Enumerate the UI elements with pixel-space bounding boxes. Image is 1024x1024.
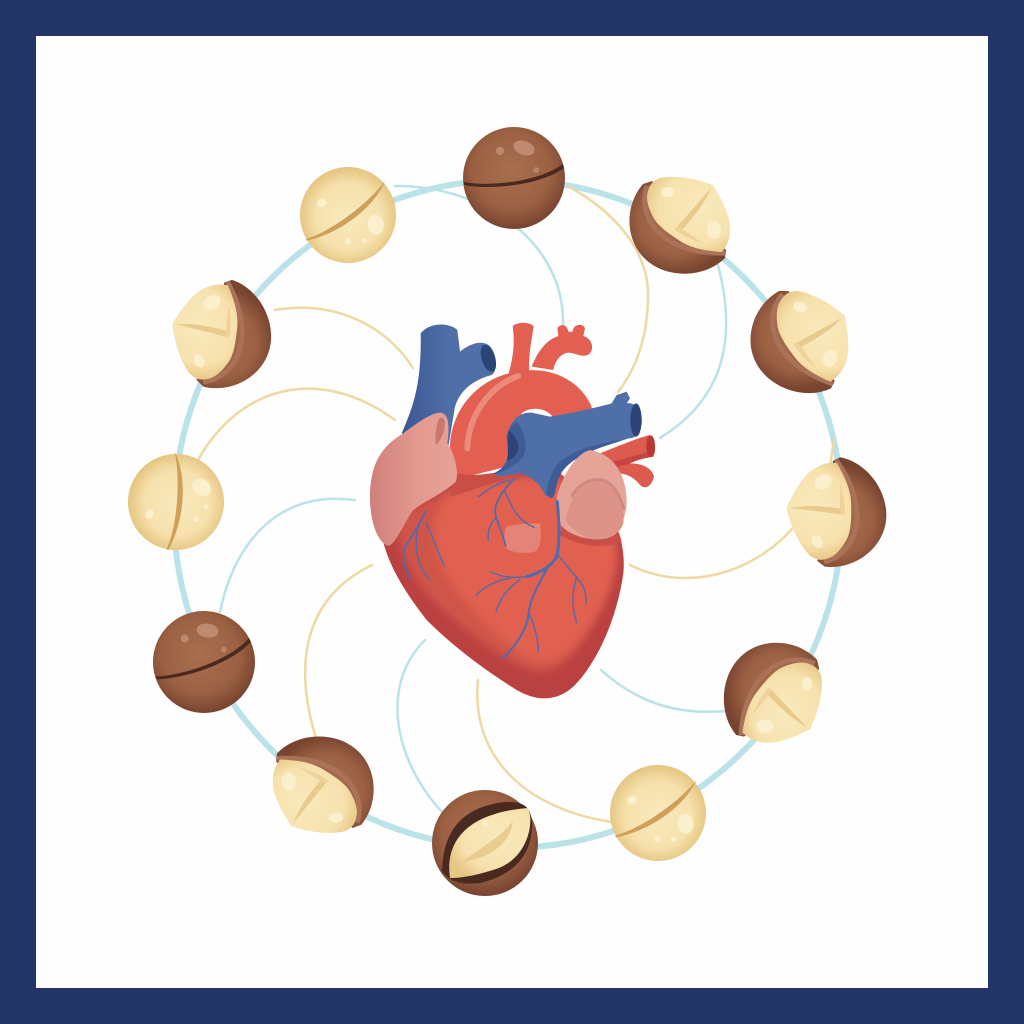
nut: cream upper left <box>293 160 403 270</box>
shading under aorta <box>450 470 520 497</box>
pulmonary vein opening <box>646 435 655 457</box>
nut: closed left <box>144 602 264 722</box>
artery opening right <box>630 403 642 437</box>
shadow beneath left atrium <box>560 527 622 546</box>
left atrium inner lobe <box>565 479 624 539</box>
nut: half shell right upper <box>736 279 864 405</box>
aortic arch <box>450 323 592 478</box>
nut: half shell lower left <box>271 735 375 835</box>
nut: cream left <box>110 436 242 568</box>
ventricle body <box>378 470 624 698</box>
pulmonary artery <box>494 392 642 498</box>
anatomical heart <box>370 323 655 698</box>
central patch <box>504 523 541 553</box>
ventricle light area <box>434 477 614 662</box>
pulmonary vein shading <box>613 452 653 468</box>
outer ring <box>174 180 842 848</box>
atrium notch <box>435 418 445 445</box>
connecting curves <box>198 186 834 822</box>
gap between vena cava and aorta <box>463 382 483 401</box>
nut: half shell upper right <box>629 177 730 274</box>
superior vena cava <box>402 325 496 447</box>
nut: cracked bottom <box>432 790 538 896</box>
ventricle mid tone <box>399 473 617 672</box>
pulmonary veins <box>600 435 655 487</box>
nut: cream lower right <box>605 760 711 866</box>
vena cava opening <box>478 343 499 374</box>
left atrium fold <box>572 480 624 510</box>
aorta highlight <box>467 376 518 448</box>
right atrium <box>370 413 457 546</box>
nut: half shell upper left <box>157 268 289 402</box>
artery left shading <box>494 422 526 474</box>
artery opening left <box>507 431 518 461</box>
nut: half shell lower right <box>720 638 825 747</box>
nut: closed top <box>463 127 565 229</box>
artery shading <box>547 438 628 498</box>
left atrium <box>557 450 627 539</box>
coronary vessels <box>404 478 586 658</box>
nut: half shell right <box>770 444 907 582</box>
